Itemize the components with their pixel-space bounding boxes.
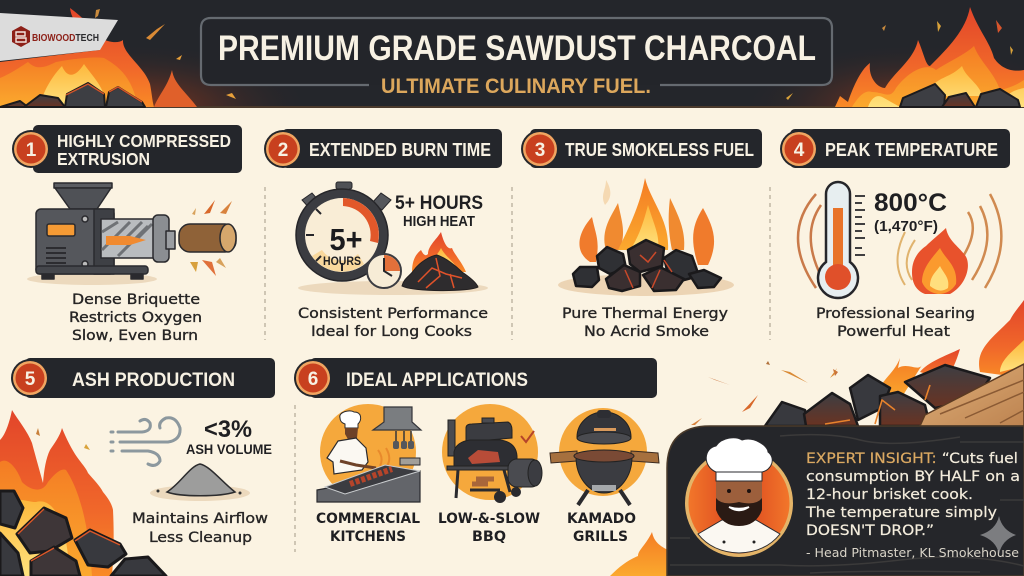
badge 1: highly compressed extrusion: 1 xyxy=(26,140,37,161)
logo mark xyxy=(12,26,30,47)
caption 4: Professional Searing xyxy=(816,306,975,322)
icon: coals and flames xyxy=(558,178,734,296)
sparkle xyxy=(980,516,1016,554)
icon: commercial kitchen chef xyxy=(317,404,421,502)
badge 1: highly compressed extrusion: EXTRUSION xyxy=(57,149,150,169)
header coals left xyxy=(0,83,145,107)
bottom left coals xyxy=(0,491,166,576)
right flames above expert panel xyxy=(875,300,1024,400)
badge 2: extended burn time: EXTENDED BURN TIME xyxy=(309,140,491,160)
caption 2: Consistent Performance xyxy=(298,306,488,322)
caption 5 xyxy=(132,511,268,546)
bottom left flames xyxy=(0,410,114,576)
badge 5: ash production: ASH PRODUCTION xyxy=(72,370,235,391)
caption 2: Ideal for Long Cooks xyxy=(311,324,472,340)
icon: ash pile xyxy=(150,464,250,501)
badge 3: true smokeless fuel: 3 xyxy=(535,140,545,161)
badge 6: ideal applications xyxy=(294,358,657,398)
ash volume label: ASH VOLUME xyxy=(186,441,272,457)
wood log xyxy=(920,364,1024,426)
label: low and slow bbq: LOW-&-SLOW xyxy=(438,511,540,527)
caption 1: Restricts Oxygen xyxy=(69,310,202,326)
icon: extruder machine xyxy=(27,183,236,285)
icon: wind xyxy=(111,418,180,465)
badge 4: peak temperature: 4 xyxy=(794,140,805,161)
label: kamado grills xyxy=(567,511,636,545)
icon: stopwatch xyxy=(296,182,488,295)
quote text: - Head Pitmaster, KL Smokehouse xyxy=(806,545,1019,560)
label: low and slow bbq xyxy=(438,511,540,545)
panel: expert insight xyxy=(667,426,1024,576)
stopwatch label: 5+ xyxy=(330,222,362,257)
label: commercial kitchens: KITCHENS xyxy=(330,529,406,545)
icon: smoker bbq xyxy=(442,404,542,503)
label: commercial kitchens xyxy=(316,511,420,545)
caption 4: Powerful Heat xyxy=(837,324,950,340)
temperature fahrenheit: (1,470°F) xyxy=(874,218,938,235)
coal heap xyxy=(765,365,990,426)
badge 2: extended burn time: 2 xyxy=(278,140,288,161)
badge 4: peak temperature xyxy=(780,129,1010,168)
big number 5+ hours: 5+ HOURS xyxy=(395,192,483,214)
quote text: DOESN'T DROP.” xyxy=(806,523,934,539)
badge 5: ash production: 5 xyxy=(25,369,36,390)
caption 2 xyxy=(298,306,488,340)
icon: glowing coal pile xyxy=(402,232,478,291)
caption 4 xyxy=(816,306,975,340)
badge 6: ideal applications: IDEAL APPLICATIONS xyxy=(346,370,528,391)
header flames right xyxy=(786,7,1024,107)
badge 4: peak temperature: PEAK TEMPERATURE xyxy=(825,140,998,160)
label: commercial kitchens: COMMERCIAL xyxy=(316,511,420,527)
ash percentage: <3% xyxy=(204,416,252,443)
header coals right xyxy=(900,84,1020,107)
quote text: EXPERT INSIGHT: “Cuts fuel xyxy=(806,451,1018,467)
label: kamado grills: GRILLS xyxy=(573,529,628,545)
icon: thermometer xyxy=(798,182,1001,298)
avatar xyxy=(685,438,793,557)
badge 5: ash production xyxy=(11,358,275,398)
logo banner xyxy=(0,13,118,61)
caption 5: Maintains Airflow xyxy=(132,511,268,527)
badge 6: ideal applications: 6 xyxy=(308,369,318,390)
caption 5: Less Cleanup xyxy=(149,530,252,546)
icon: kamado grill xyxy=(550,408,659,505)
high heat label: HIGH HEAT xyxy=(403,214,475,230)
title: PREMIUM GRADE SAWDUST CHARCOAL xyxy=(218,29,816,68)
subtitle: ULTIMATE CULINARY FUEL. xyxy=(381,74,651,98)
badge 3: true smokeless fuel xyxy=(521,129,762,168)
bottom left coal glow xyxy=(18,509,120,561)
badge 2: extended burn time xyxy=(264,129,502,168)
quote text: consumption BY HALF on a xyxy=(806,469,1020,485)
caption 1 xyxy=(69,292,202,344)
quote text: 12-hour brisket cook. xyxy=(806,487,973,503)
header band xyxy=(0,0,1024,108)
caption 1: Slow, Even Burn xyxy=(72,328,198,344)
stopwatch hours label: HOURS xyxy=(323,256,361,268)
caption 3 xyxy=(562,306,728,340)
badge 1: highly compressed extrusion: HIGHLY COMPRESSED xyxy=(57,131,231,151)
sparks xyxy=(691,361,838,425)
caption 1: Dense Briquette xyxy=(72,292,200,308)
logo text: BIOWOODTECH xyxy=(32,32,99,44)
icon: heat flame xyxy=(898,228,968,294)
title box xyxy=(201,18,832,85)
badge 1: highly compressed extrusion xyxy=(12,125,242,173)
badge 3: true smokeless fuel: TRUE SMOKELESS FUEL xyxy=(565,140,754,160)
caption 3: Pure Thermal Energy xyxy=(562,306,728,322)
bottom centre flame xyxy=(610,532,668,576)
quote text: The temperature simply xyxy=(805,505,998,521)
label: kamado grills: KAMADO xyxy=(567,511,636,527)
temperature value: 800°C xyxy=(874,189,947,217)
quote text xyxy=(805,451,1020,560)
label: low and slow bbq: BBQ xyxy=(472,529,506,545)
header flames left xyxy=(0,8,236,107)
caption 3: No Acrid Smoke xyxy=(584,324,709,340)
